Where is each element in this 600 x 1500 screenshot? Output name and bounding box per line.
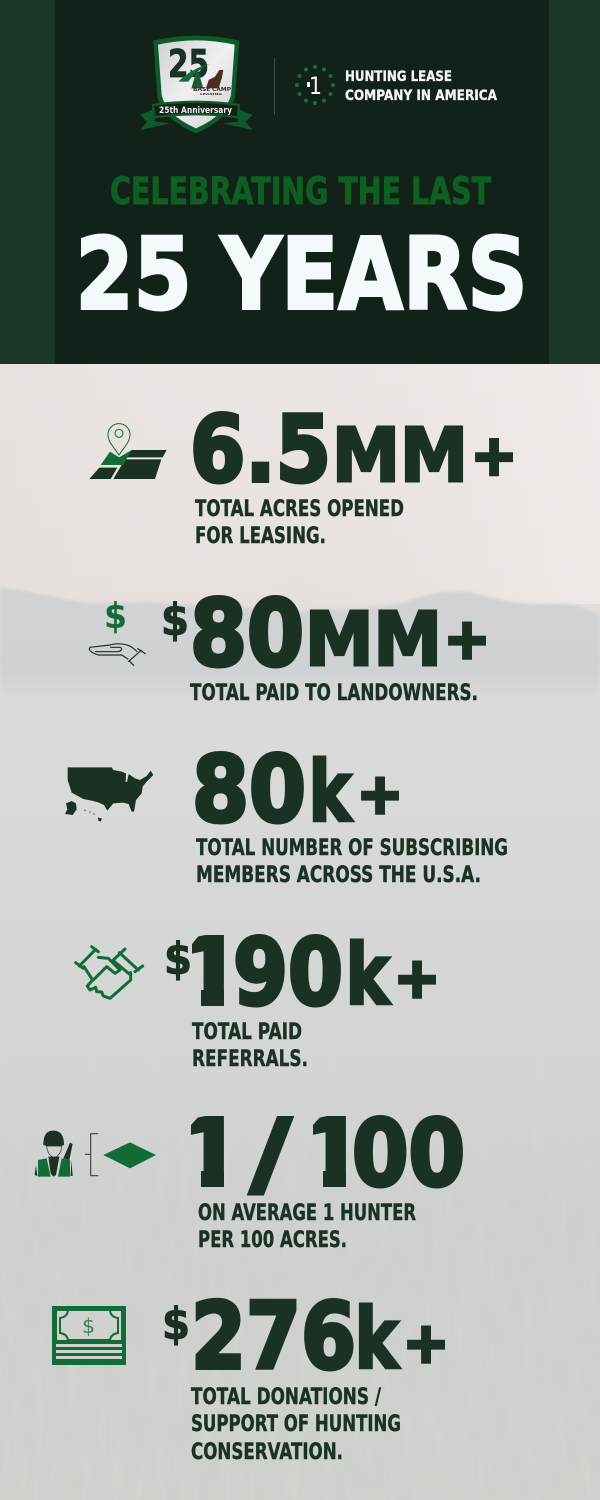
number: 276k+: 276	[191, 1283, 356, 1390]
icon: stack of dollar bills: $	[82, 1314, 95, 1338]
logo: Base Camp Leasing 25th anniversary shield: 25	[168, 42, 209, 86]
badge: number one with ring of stars: 1	[309, 72, 322, 100]
badge: number one with ring of stars	[295, 65, 335, 105]
number: 1 / 100: 1	[180, 1100, 244, 1207]
icon: land parcels with map pin	[89, 424, 167, 479]
number: 276k+: +	[403, 1311, 449, 1375]
caption: hunter average	[198, 1201, 416, 1253]
icon: stack of dollar bills	[52, 1306, 126, 1365]
icon: hunter with bracket and acre diamond	[35, 1131, 156, 1177]
caption: paid referrals	[192, 1020, 308, 1072]
number: 80MM+: +	[444, 607, 490, 671]
number: 1 / 100: /	[250, 1100, 291, 1207]
number: 80k+	[192, 736, 403, 843]
caption: subscribing members	[196, 836, 508, 888]
number: 190k+: k	[346, 926, 391, 1024]
tagline: hunting lease company in america: COMPANY IN AMERICA	[345, 88, 497, 104]
tagline: hunting lease company in america	[345, 69, 497, 104]
number: 1 / 100: 1	[302, 1100, 366, 1207]
number: 6.5MM+: 6.5	[190, 396, 331, 503]
caption: paid referrals: REFERRALS.	[192, 1047, 308, 1072]
logo: Base Camp Leasing 25th anniversary shield: BASE CAMP	[193, 87, 231, 93]
caption: hunter average: ON AVERAGE 1 HUNTER	[198, 1201, 416, 1226]
divider	[274, 58, 275, 115]
logo: Base Camp Leasing 25th anniversary shield	[140, 36, 253, 133]
title: 25 years: 25 YEARS	[76, 218, 528, 332]
stat: paid to landowners	[89, 580, 490, 706]
number: 80MM+: 80	[190, 580, 304, 687]
stat: donations	[52, 1283, 449, 1465]
stat: subscribing members	[65, 736, 508, 888]
number: 6.5MM+	[190, 396, 517, 503]
panel: faded landscape background	[0, 364, 600, 614]
dollar sign: $	[161, 594, 189, 646]
number: 80MM+	[190, 580, 490, 687]
caption: subscribing members: TOTAL NUMBER OF SUBSCRIBING	[196, 836, 508, 861]
logo: Base Camp Leasing 25th anniversary shield: LEASING	[200, 92, 223, 96]
number: 276k+: k	[354, 1290, 400, 1388]
icon: hand holding dollar: $	[104, 596, 127, 637]
stat: paid referrals	[74, 934, 436, 1066]
caption: total acres opened: TOTAL ACRES OPENED	[195, 497, 404, 522]
dollar sign: $	[162, 1298, 190, 1350]
caption: subscribing members: MEMBERS ACROSS THE U.S.A.	[196, 863, 481, 888]
number: 190k+: 90	[233, 919, 343, 1026]
tagline: hunting lease company in america: HUNTING LEASE	[345, 69, 452, 85]
number: 190k+: +	[394, 946, 440, 1010]
caption: donations: SUPPORT OF HUNTING	[191, 1412, 401, 1437]
stat: hunter per acres	[34, 1115, 463, 1248]
title: celebrating the last: CELEBRATING THE LAST	[110, 170, 492, 213]
number: 80k+: +	[357, 762, 403, 826]
panel: dark header	[0, 0, 600, 364]
caption: total acres opened: FOR LEASING.	[195, 524, 326, 549]
number: 190k+	[192, 934, 436, 1008]
caption: donations	[191, 1385, 401, 1465]
number: 80k+: k	[308, 743, 353, 841]
number: 190k+: 1	[180, 919, 244, 1026]
icon: hand holding dollar	[89, 596, 146, 666]
caption: total paid to landowners: TOTAL PAID TO LANDOWNERS.	[190, 681, 478, 706]
icon: map of the USA	[65, 767, 153, 822]
caption: hunter average: PER 100 ACRES.	[198, 1228, 347, 1253]
caption: total acres opened	[195, 497, 404, 549]
caption: paid referrals: TOTAL PAID	[192, 1020, 302, 1045]
number: 1 / 100: 00	[352, 1100, 465, 1207]
number: 6.5MM+: +	[471, 423, 517, 487]
logo: Base Camp Leasing 25th anniversary shield: 25th Anniversary	[159, 106, 232, 116]
number: 6.5MM+: MM	[332, 413, 468, 499]
number: 1 / 100	[191, 1115, 463, 1196]
dollar sign: $	[164, 934, 192, 984]
number: 80k+: 80	[192, 736, 306, 843]
stat: acres opened	[89, 396, 517, 549]
number: 80MM+: MM	[305, 597, 442, 683]
caption: donations: CONSERVATION.	[191, 1440, 343, 1465]
caption: donations: TOTAL DONATIONS /	[191, 1385, 382, 1410]
icon: handshake	[76, 947, 143, 998]
